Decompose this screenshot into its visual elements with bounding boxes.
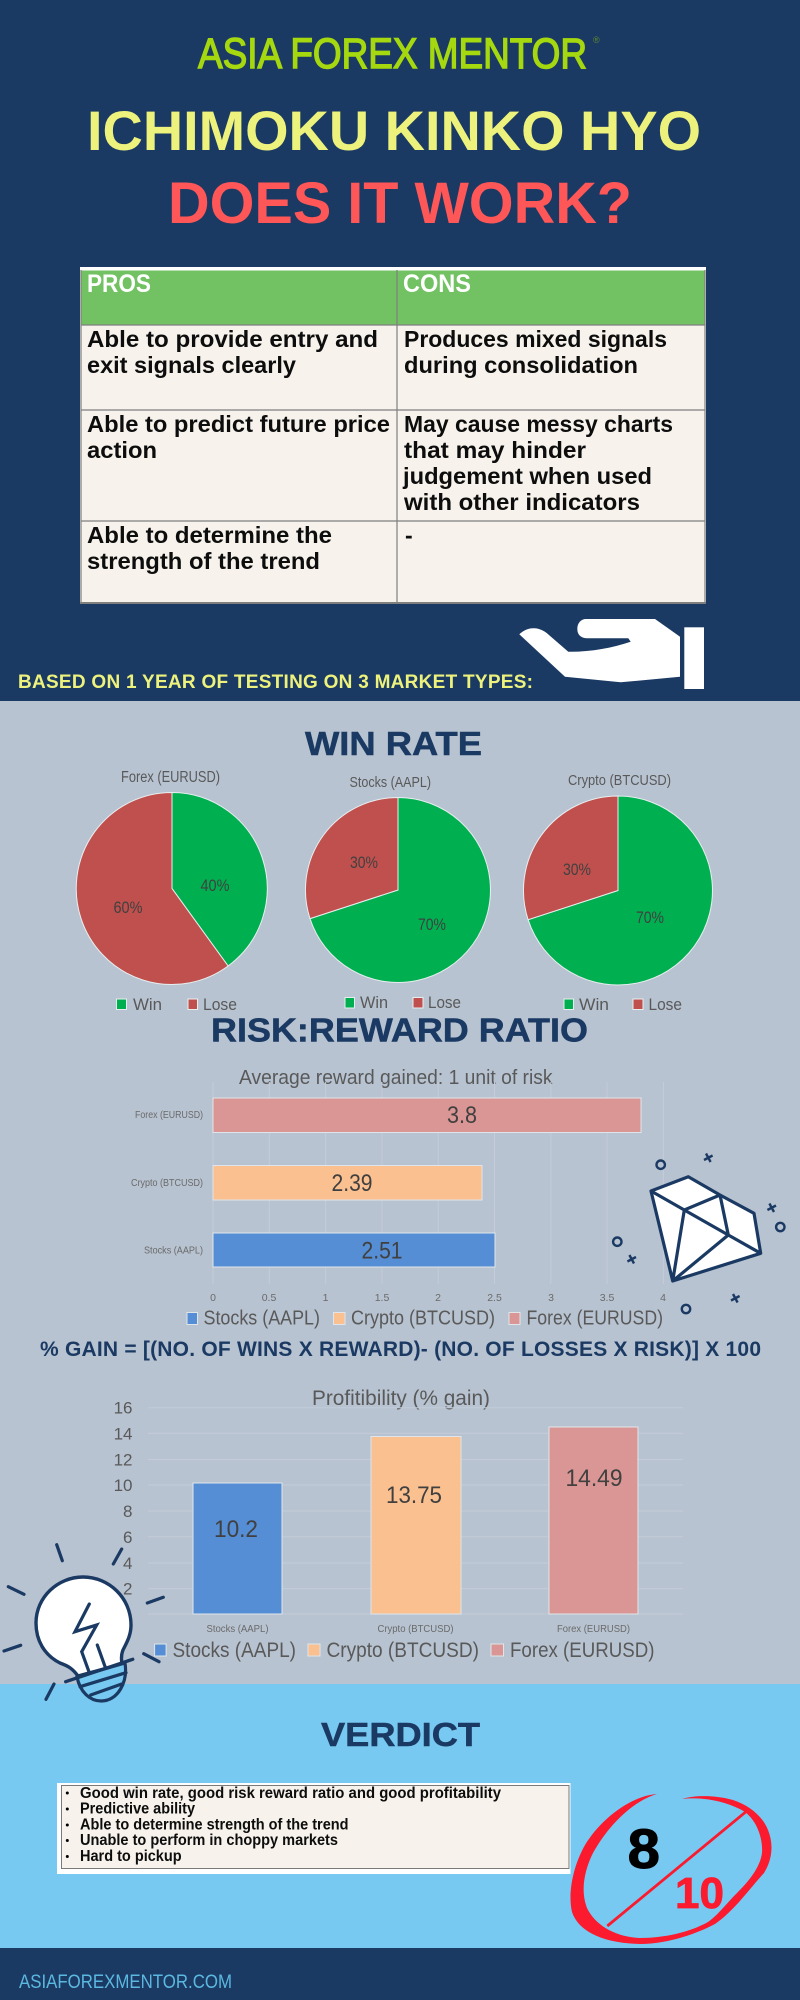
bar chart: profitability: Stocks (AAPL) <box>206 1623 268 1635</box>
icon: hand <box>519 619 704 689</box>
logo: ASIA FOREX MENTOR <box>198 30 587 78</box>
bar chart: risk reward: 0.5 <box>262 1292 276 1304</box>
pie chart: stocks: Stocks (AAPL) <box>350 774 431 791</box>
pie chart: stocks <box>305 774 490 1012</box>
verdict bullets: Unable to perform in choppy markets <box>80 1832 338 1849</box>
bar chart: profitability: 8 <box>123 1502 132 1521</box>
bar chart: profitability: 14 <box>114 1424 132 1444</box>
bar chart: profitability: 6 <box>123 1528 132 1547</box>
bar chart: profitability: Profitibility (% gain) <box>312 1387 490 1410</box>
row 2 cons: that may hinder <box>404 437 586 463</box>
footer url: ASIAFOREXMENTOR.COM <box>19 1972 232 1993</box>
subtitle: DOES IT WORK? <box>168 171 632 236</box>
pros and cons table <box>80 267 706 604</box>
panel: charts background <box>0 701 800 1685</box>
heading: risk reward ratio: RISK:REWARD RATIO <box>211 1012 588 1048</box>
bar chart: risk reward: 3.8 <box>447 1102 477 1129</box>
pie chart: stocks: Win <box>360 993 388 1012</box>
bar chart: risk reward: 2.5 <box>487 1292 502 1304</box>
bar chart: risk reward: Crypto (BTCUSD) <box>351 1308 495 1330</box>
pie chart: crypto: Crypto (BTCUSD) <box>568 772 671 789</box>
panel: verdict background <box>0 1684 800 1948</box>
bar chart: profitability: Stocks (AAPL) <box>172 1639 296 1662</box>
bar chart: profitability: 14.49 <box>566 1465 622 1492</box>
bar chart: risk reward: Average reward gained: 1 unit of risk <box>239 1067 553 1089</box>
bar chart: profitability: 13.75 <box>386 1482 442 1509</box>
score: 8 out of 10 <box>571 1794 771 1944</box>
bar chart: risk reward: 3 <box>548 1292 554 1304</box>
score: 8 out of 10: 10 <box>675 1869 724 1918</box>
row 1 cons: Produces mixed signals <box>404 326 667 352</box>
verdict bullets <box>66 1785 501 1865</box>
logo: ® <box>593 35 600 45</box>
row 3 cons: - <box>405 522 413 548</box>
cons header: CONS <box>403 270 471 298</box>
row 2 cons: May cause messy charts <box>404 411 673 437</box>
bar chart: risk reward: 0 <box>210 1292 216 1304</box>
testing note: BASED ON 1 YEAR OF TESTING ON 3 MARKET TYPES: <box>18 672 533 693</box>
bar chart: risk reward: 2.39 <box>332 1170 372 1197</box>
bar chart: risk reward: 2.51 <box>362 1238 402 1264</box>
pie chart: forex: Forex (EURUSD) <box>121 769 220 786</box>
bar chart: risk reward: Stocks (AAPL) <box>204 1308 320 1330</box>
bar chart: profitability: 10 <box>114 1476 132 1495</box>
panel: footer background <box>0 1948 800 2000</box>
icon: light bulb <box>4 1545 163 1701</box>
verdict bullets: Predictive ability <box>80 1800 195 1818</box>
row 1 pros: exit signals clearly <box>87 352 296 378</box>
row 1 pros: Able to provide entry and <box>87 326 378 352</box>
pie chart: forex: 40% <box>200 876 230 895</box>
row 3 pros: Able to determine the <box>87 522 332 548</box>
verdict box <box>57 1783 570 1874</box>
formula: % GAIN = [(NO. OF WINS X REWARD)- (NO. OF LOSSES X RISK)] X 100 <box>40 1338 761 1361</box>
pie chart: forex: Lose <box>203 995 237 1014</box>
verdict bullets: Hard to pickup <box>80 1848 182 1865</box>
verdict bullets: Able to determine strength of the trend <box>80 1816 348 1834</box>
bar chart: risk reward: Crypto (BTCUSD) <box>131 1177 203 1189</box>
bar chart: risk reward: Forex (EURUSD) <box>526 1308 663 1330</box>
bar chart: profitability: Forex (EURUSD) <box>510 1639 654 1662</box>
bar chart: profitability: 2 <box>123 1580 132 1598</box>
bar chart: risk reward: 1.5 <box>375 1292 389 1304</box>
bar chart: risk reward: 3.5 <box>600 1292 614 1304</box>
pie chart: stocks: Lose <box>428 993 461 1012</box>
bar chart: risk reward: Forex (EURUSD) <box>135 1109 203 1121</box>
verdict bullets: Good win rate, good risk reward ratio and good profitability <box>80 1785 501 1802</box>
bar chart: profitability: 10.2 <box>214 1516 258 1543</box>
bar chart: profitability: Crypto (BTCUSD) <box>378 1623 454 1635</box>
pie chart: stocks: 70% <box>418 915 446 934</box>
panel: header background <box>0 0 800 701</box>
pie chart: forex <box>76 769 267 1014</box>
bar chart: risk reward <box>131 1067 666 1330</box>
heading: win rate: WIN RATE <box>305 725 482 762</box>
pie chart: crypto: Win <box>579 995 609 1014</box>
row 3 pros: strength of the trend <box>87 548 320 574</box>
pie chart: forex: 60% <box>114 898 142 917</box>
pie chart: crypto: 70% <box>636 908 664 927</box>
pie chart: forex: Win <box>133 995 162 1014</box>
bar chart: risk reward: Stocks (AAPL) <box>144 1244 203 1256</box>
heading: verdict: VERDICT <box>321 1716 480 1753</box>
pie chart: crypto: 30% <box>563 860 591 879</box>
icon: diamond <box>613 1154 784 1313</box>
bar chart: profitability <box>114 1387 683 1662</box>
pie chart: crypto <box>523 772 712 1014</box>
bar chart: profitability: 16 <box>114 1398 132 1418</box>
row 1 cons: during consolidation <box>404 352 638 378</box>
bar chart: profitability: Crypto (BTCUSD) <box>326 1639 479 1662</box>
bar chart: risk reward: 1 <box>323 1292 329 1304</box>
row 2 cons: with other indicators <box>403 489 640 515</box>
bar chart: profitability: 4 <box>123 1554 132 1573</box>
score: 8 out of 10: 8 <box>628 1817 660 1880</box>
pie chart: crypto: Lose <box>648 995 682 1014</box>
row 2 cons: judgement when used <box>402 463 652 489</box>
bar chart: risk reward: 4 <box>660 1292 666 1304</box>
row 2 pros: Able to predict future price <box>87 411 390 437</box>
pie chart: stocks: 30% <box>350 853 378 872</box>
bar chart: profitability: 12 <box>114 1450 132 1470</box>
pros header: PROS <box>87 270 151 298</box>
row 2 pros: action <box>87 437 157 463</box>
title: ICHIMOKU KINKO HYO <box>87 99 701 162</box>
bar chart: risk reward: 2 <box>435 1292 441 1304</box>
bar chart: profitability: Forex (EURUSD) <box>557 1623 630 1635</box>
